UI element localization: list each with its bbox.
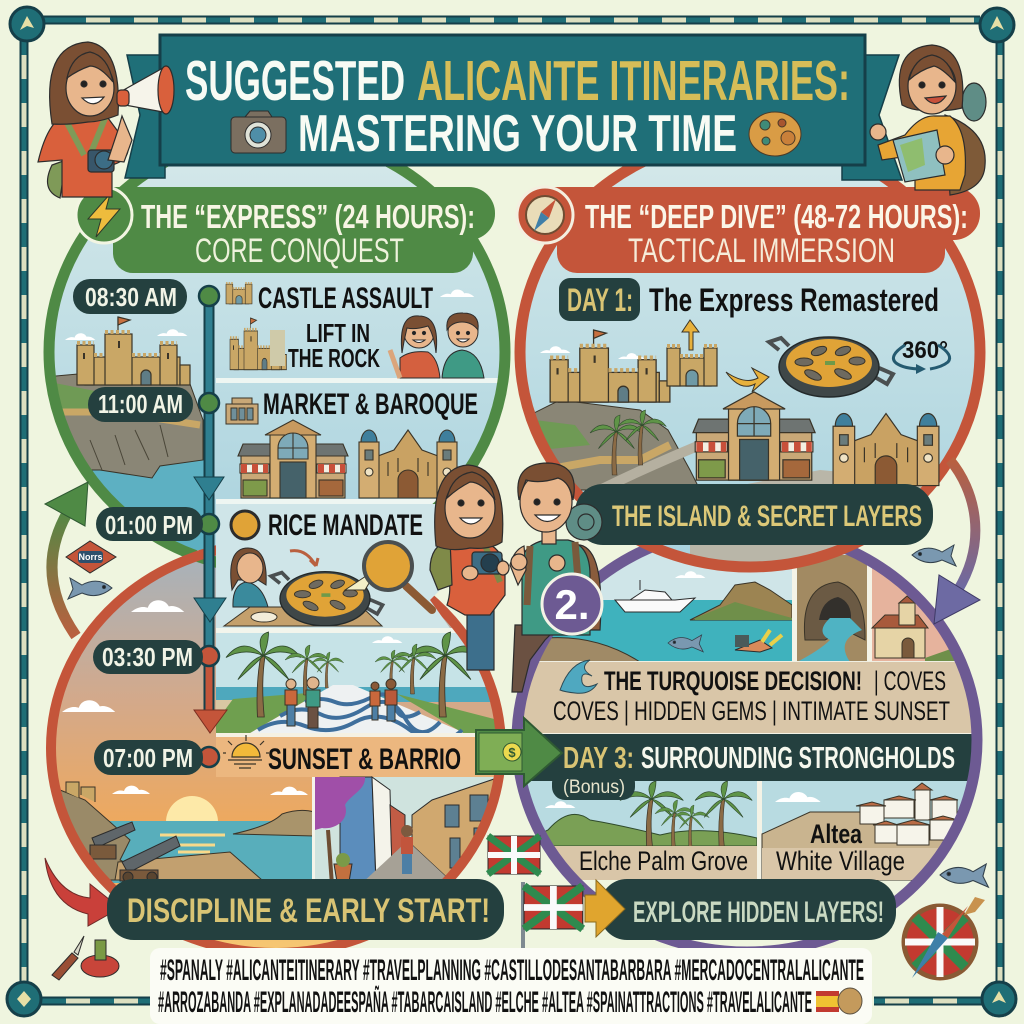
callout: discipline and early start [107, 879, 504, 940]
label: elche palm grove: Elche Palm Grove [579, 846, 748, 876]
heading: day 3 surrounding strongholds: DAY 3: [563, 740, 634, 775]
heading: express: THE “EXPRESS” (24 HOURS): [141, 198, 475, 235]
header: express [76, 187, 495, 273]
icon: compass with basque colours [904, 897, 985, 978]
small castle: lift in the rock [230, 318, 286, 370]
panel: barrio street [312, 777, 502, 885]
timeline [194, 286, 227, 767]
label: day 1: DAY 1: [567, 282, 633, 318]
illustration: central market [238, 420, 348, 498]
label: bonus [552, 770, 635, 800]
girl traveller [430, 465, 509, 670]
heading: the express remastered: The Express Remastered [649, 282, 939, 318]
illustration: cave [797, 555, 867, 663]
title line 1 [185, 49, 850, 113]
section title: sunset and barrio: SUNSET & BARRIO [268, 743, 461, 776]
icon: fish [68, 578, 112, 599]
icon: castle [226, 283, 252, 304]
panel: express lower circle sunset background [54, 166, 500, 948]
time label: 11:00 AM: 11:00 AM [98, 389, 183, 419]
panel: hashtags [150, 948, 872, 1024]
purple ring [517, 528, 977, 952]
illustration: basilica [833, 413, 939, 486]
arrow: tasting curve [290, 551, 318, 566]
illustration: castle remastered [550, 330, 670, 402]
illustration: girl tasting [231, 548, 268, 607]
band: turquoise decision background [510, 662, 985, 733]
illustration: chapel [870, 568, 954, 661]
icon: tools and oil [52, 936, 119, 980]
label: day 1 [559, 278, 640, 321]
flag: basque small [488, 836, 540, 874]
illustration: baroque basilica [359, 430, 457, 498]
band: day 3 [520, 734, 980, 781]
time label: 08:30 AM: 08:30 AM [85, 282, 177, 312]
arrow: green to orange loop [45, 482, 88, 636]
icon: cannons [90, 822, 180, 882]
badge: the island and secret layers [575, 484, 933, 545]
illustration: hillside [535, 402, 698, 490]
icon: metro sign: Norrs [78, 552, 103, 562]
badge: number 2 [542, 574, 602, 634]
icon: tower with up arrow [667, 320, 717, 386]
orange ring [51, 543, 501, 953]
arrow: discipline [45, 858, 120, 926]
character: girl with map [870, 45, 986, 195]
callout: explore hidden layers [600, 879, 896, 940]
arrow: to rice [194, 477, 224, 500]
illustration: boat and island [530, 571, 792, 662]
panel: deep dive circle [526, 166, 974, 562]
icon: metro sign [66, 541, 116, 573]
icon: wave [560, 660, 597, 693]
time label: 03:30 PM: 03:30 PM [102, 642, 193, 672]
heading: day 3 surrounding strongholds [563, 740, 955, 775]
subheading: tactical immersion: TACTICAL IMMERSION [628, 232, 895, 270]
boy traveller [510, 463, 602, 692]
illustration: altea village [762, 781, 982, 880]
icon: palette dish [749, 112, 801, 156]
icon: two travellers waving [390, 313, 484, 378]
icon: 360 degrees: 360° [902, 337, 948, 364]
label: altea white village: Altea [810, 819, 863, 849]
time label: 01:00 PM: 01:00 PM [105, 510, 193, 540]
central characters: girl and boy [430, 463, 602, 692]
label: bonus: (Bonus) [563, 777, 625, 798]
text: turquoise decision: | COVES [874, 666, 946, 696]
label: altea white village: White Village [776, 846, 905, 876]
icon: fish right [912, 545, 956, 566]
callout: lift in the rock [288, 318, 380, 373]
green ring [49, 134, 505, 570]
illustration: paella with magnifier [271, 542, 432, 626]
section title: market and baroque: MARKET & BAROQUE [263, 388, 478, 421]
panel: purple circle content [510, 540, 985, 881]
icon: megaphone [117, 66, 174, 114]
time label: 07:00 PM: 07:00 PM [103, 743, 193, 773]
icon: spanish flag and palette [816, 988, 862, 1014]
icon: sun [223, 735, 269, 768]
label: altea white village [776, 819, 905, 876]
flag: basque large with pole [523, 882, 583, 950]
section title: rice mandate: RICE MANDATE [268, 509, 423, 542]
arrow: deep dive to purple [934, 460, 980, 624]
header: deep dive [517, 187, 980, 273]
text: turquoise decision: THE TURQUOISE DECISION! [604, 666, 862, 696]
panel: castle on the cliff [56, 316, 204, 550]
subheading: core conquest: CORE CONQUEST [195, 232, 404, 270]
illustration: palm trees [590, 410, 666, 475]
badge: number 2: 2. [554, 581, 590, 628]
text: turquoise decision [553, 666, 950, 726]
icon: fish lower right [940, 864, 988, 887]
arrow: money between circles: $ [508, 745, 516, 760]
callout: discipline and early start: DISCIPLINE & EARLY START! [127, 892, 490, 930]
panel: right-hand activity strips [216, 378, 506, 777]
icon: 360 degrees [893, 337, 950, 374]
red ring [520, 137, 980, 567]
callout: lift in the rock: LIFT IN [306, 318, 370, 348]
title line 1: SUGGESTED [185, 49, 405, 113]
panel: promenade [216, 632, 495, 733]
arrow: to promenade [194, 598, 226, 622]
arrow: money between circles [476, 718, 562, 786]
icon: compass [517, 187, 573, 243]
time label: 11:00 AM [88, 387, 193, 422]
ribbon tails [125, 55, 165, 178]
icon: paella dish [231, 511, 259, 539]
arrow: gold to explore [585, 880, 625, 937]
illustration: market [693, 392, 815, 480]
callout: lift in the rock: THE ROCK [288, 343, 380, 373]
icon: market [226, 398, 258, 424]
icon: camera [231, 111, 286, 153]
section title: castle assault: CASTLE ASSAULT [258, 282, 433, 315]
icon: lightning [76, 187, 132, 243]
title line 2: MASTERING YOUR TIME [298, 105, 737, 163]
title banner [125, 35, 902, 180]
character: girl with megaphone [38, 42, 174, 198]
arrow: to sunset [194, 710, 227, 733]
arrow: castle to paella [726, 368, 769, 392]
panel: rice mandate [216, 504, 470, 628]
illustration: elche palm grove [515, 781, 757, 880]
panel: sunset fortress view [60, 777, 502, 885]
illustration: paella pan [769, 337, 893, 397]
